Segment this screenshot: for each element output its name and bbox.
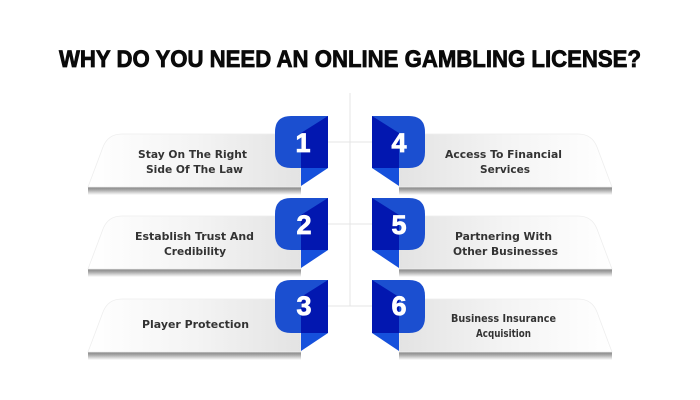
badge 3	[275, 280, 328, 351]
badge 3: 3	[296, 291, 312, 321]
label 6: Business Insurance	[451, 313, 556, 325]
panel: item 3	[88, 280, 328, 360]
label 3: Player Protection	[142, 318, 249, 331]
label 6: Acquisition	[476, 328, 531, 340]
label 2: Credibility	[164, 245, 226, 258]
label 2: Establish Trust And	[135, 230, 254, 243]
central connector lines	[328, 93, 372, 306]
panel: item 4	[372, 116, 612, 195]
badge 2: 2	[296, 210, 312, 240]
label 1: Side Of The Law	[146, 163, 243, 176]
label 1: Stay On The Right	[138, 148, 247, 161]
label 4: Services	[480, 163, 530, 176]
label 5: Other Businesses	[453, 245, 558, 258]
card 1	[88, 134, 301, 195]
label 5	[453, 230, 558, 258]
card 2	[88, 216, 301, 277]
panel: item 5	[372, 198, 612, 277]
title: WHY DO YOU NEED AN ONLINE GAMBLING LICENSE?	[59, 46, 641, 73]
label 6	[451, 313, 556, 340]
card 5	[399, 216, 612, 277]
panel: item 1	[88, 116, 328, 195]
label 1	[138, 148, 247, 176]
badge 4	[372, 116, 425, 186]
label 4	[445, 148, 562, 176]
card 6	[399, 299, 612, 360]
label 2	[135, 230, 254, 258]
badge 1	[275, 116, 328, 186]
badge 6: 6	[391, 291, 407, 321]
panel: item 2	[88, 198, 328, 277]
badge 4: 4	[391, 128, 407, 158]
badge 5	[372, 198, 425, 268]
badge 2	[275, 198, 328, 268]
card 4	[399, 134, 612, 195]
badge 6	[372, 280, 425, 351]
badge 1: 1	[295, 128, 311, 158]
card 3	[88, 299, 301, 360]
label 5: Partnering With	[455, 230, 552, 243]
badge 5: 5	[391, 210, 407, 240]
panel: item 6	[372, 280, 612, 360]
label 4: Access To Financial	[445, 148, 562, 161]
